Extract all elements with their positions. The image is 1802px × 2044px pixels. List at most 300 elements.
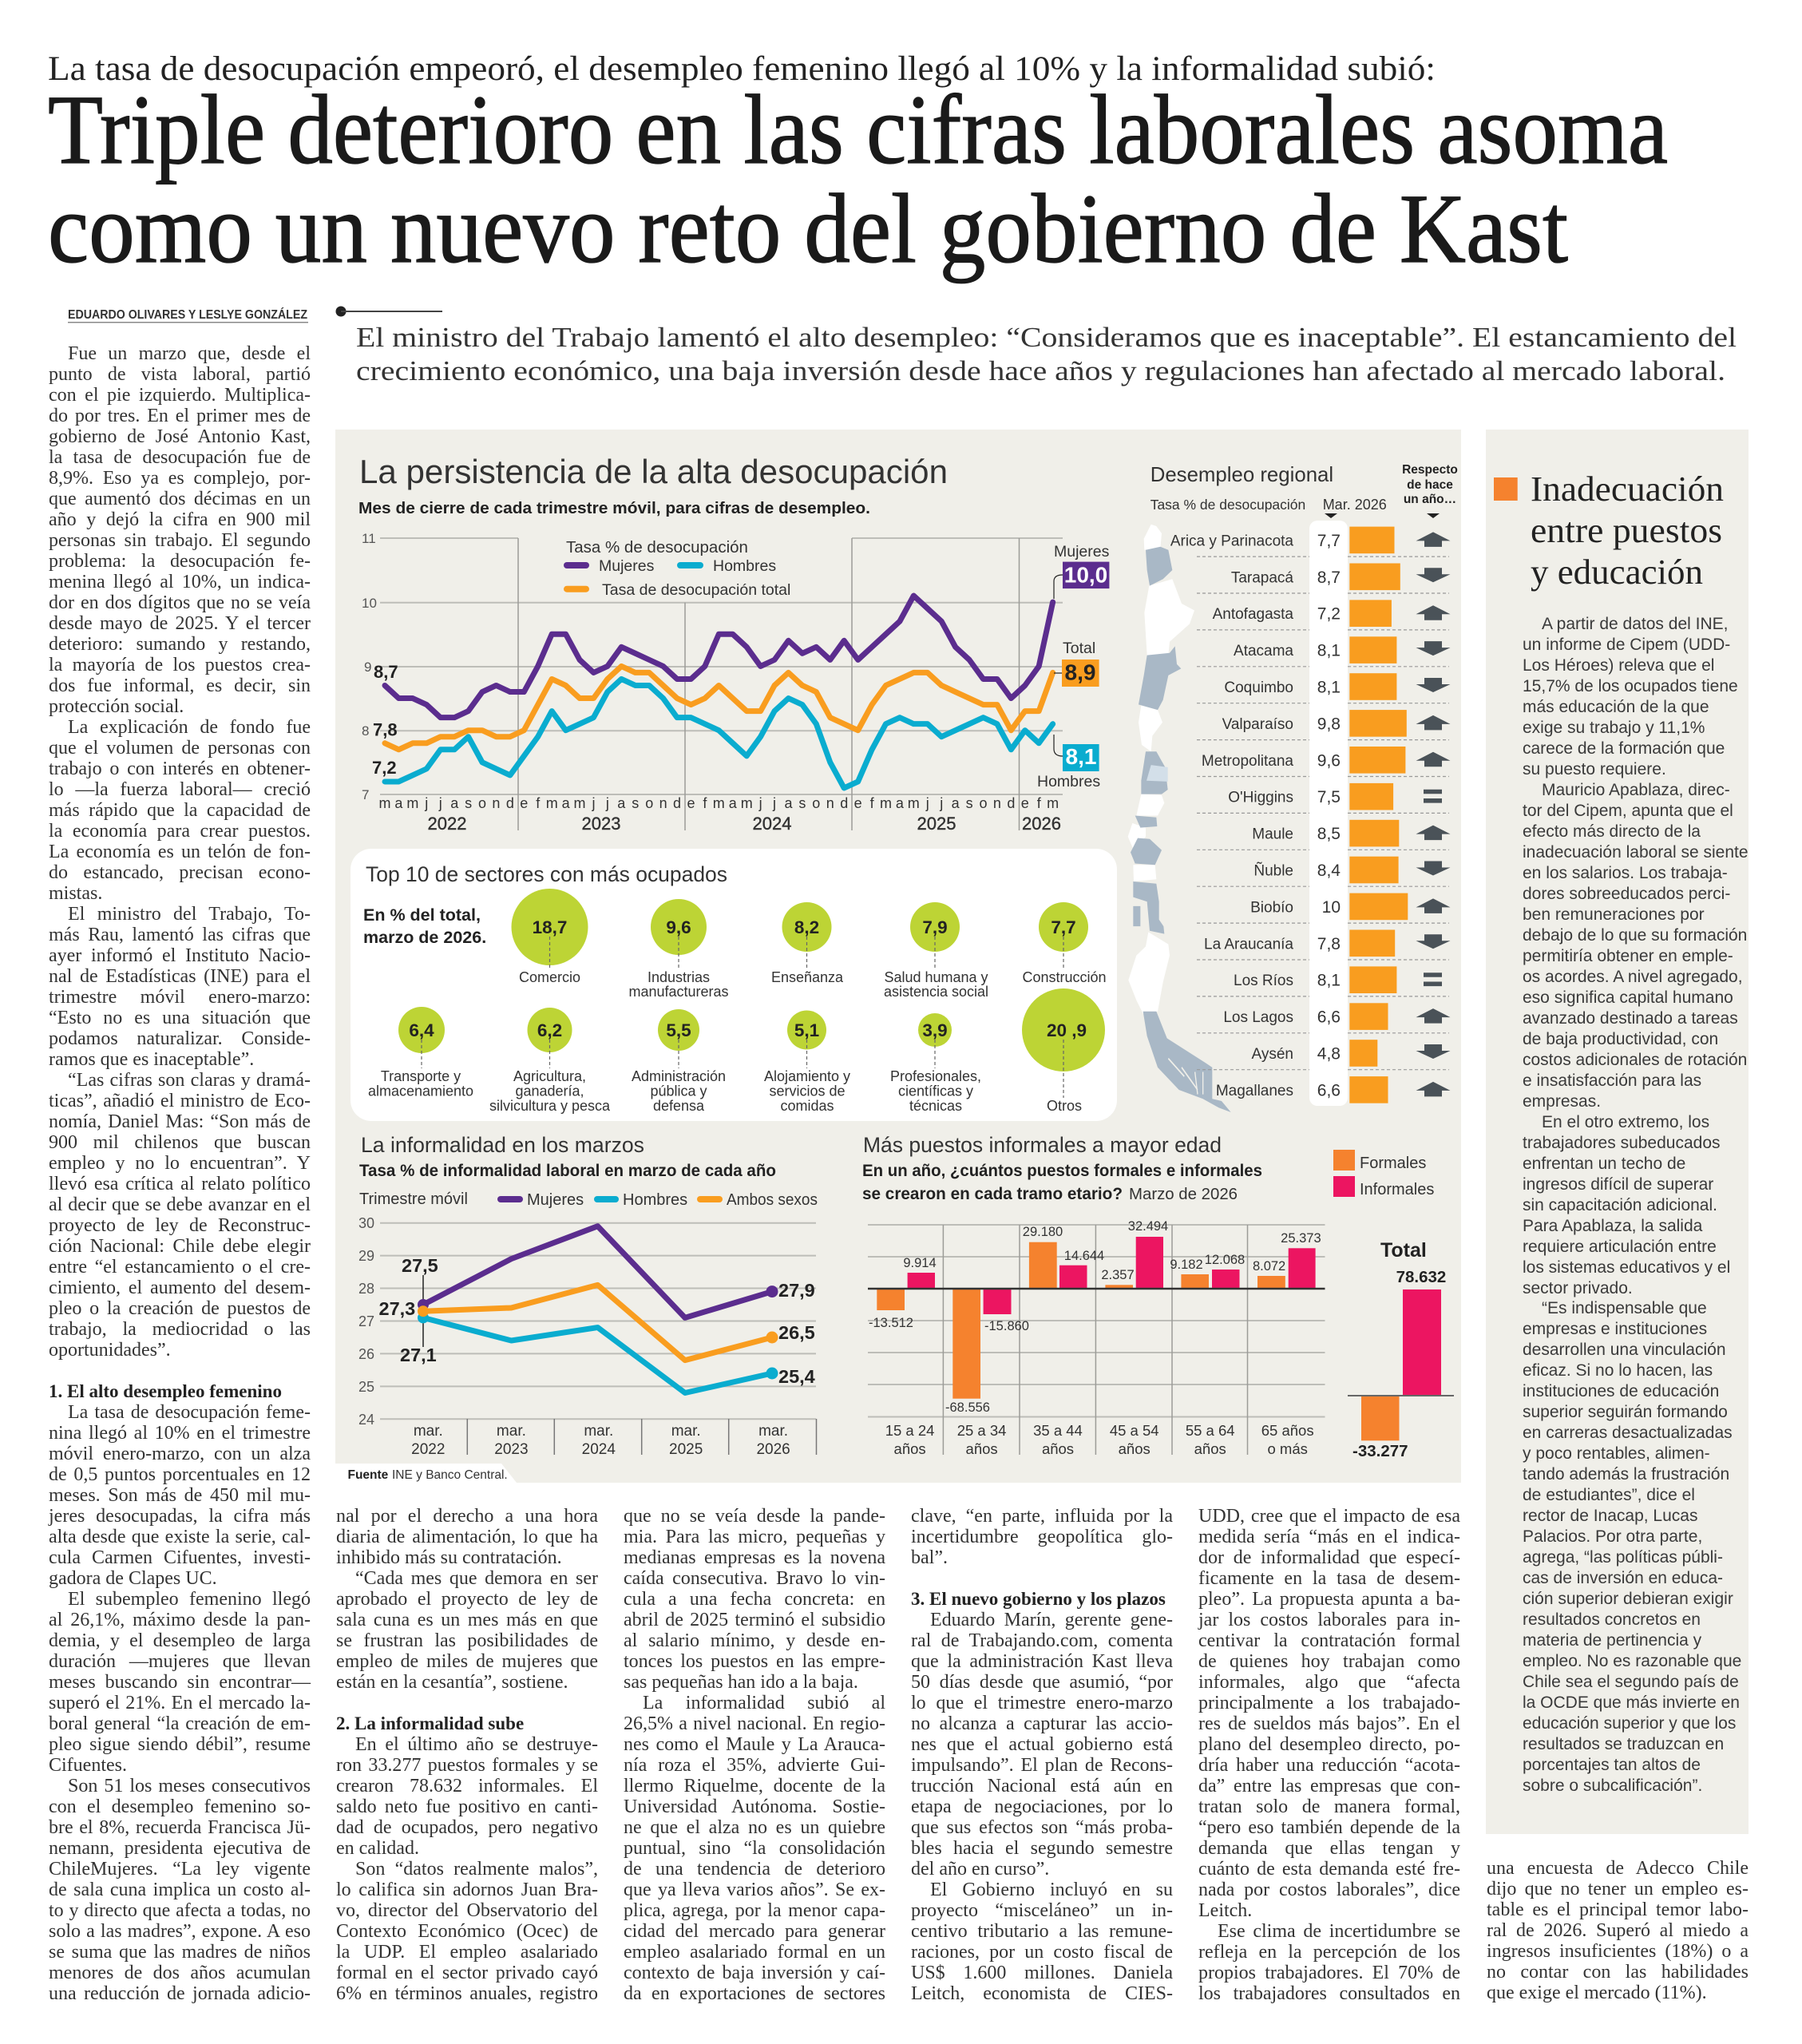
sidebar body text: “Es indispensable que: [1542, 1299, 1707, 1317]
text column 3: al salario mínimo, y desde en-: [624, 1630, 885, 1651]
region names: Valparaíso: [1222, 716, 1293, 733]
deck text: [356, 322, 1737, 386]
informality grid and axes: mar.: [497, 1423, 526, 1440]
regional subtitle and column heads: Mar. 2026: [1323, 497, 1387, 513]
month and year axis labels: [378, 795, 1061, 834]
informality grid and axes: 24: [358, 1412, 374, 1428]
age group labels: años: [1194, 1440, 1226, 1457]
informality legend: Hombres: [623, 1191, 687, 1209]
bubble values: 6,2: [537, 1020, 562, 1040]
sidebar title: [1531, 469, 1724, 592]
text column 1: ticas”, añadió el ministro de Eco-: [49, 1091, 311, 1111]
text column 4: impulsando”. El plan de Recons-: [911, 1755, 1173, 1776]
text column 6: ingresos insuficientes (18%) o a: [1487, 1941, 1749, 1962]
informality legend: Trimestre móvil: [359, 1190, 468, 1208]
text column 3: [624, 1506, 885, 2004]
sidebar body text: Para Apablaza, la salida: [1523, 1217, 1702, 1235]
bubble labels: Alojamiento y: [764, 1068, 850, 1084]
sidebar body text: requiere articulación entre: [1523, 1238, 1717, 1256]
bubble labels: Industrias: [648, 969, 710, 985]
text column 5: nada por costos laborales”, dice: [1198, 1880, 1460, 1900]
sidebar body text: porcentajes tan altos de: [1523, 1756, 1701, 1774]
bars subtitle: Marzo de 2026: [1129, 1186, 1238, 1203]
line: hombres: [385, 679, 1053, 788]
text column 3: mia. Para las micro, pequeñas y: [624, 1527, 885, 1547]
regional subtitle and column heads: un año…: [1404, 493, 1456, 506]
text column 3: ne que el alza no es un quiebre: [624, 1817, 885, 1838]
text column 1: que aumentó dos décimas en un: [49, 489, 311, 509]
text column 5: dría haber una reducción “acota-: [1198, 1755, 1460, 1776]
age group labels: años: [1119, 1440, 1151, 1457]
text column 1: cula Carmen Cifuentes, investi-: [49, 1547, 311, 1568]
y axis and grid: 10: [362, 596, 377, 611]
text column 5: tratan solo de manera formal,: [1198, 1796, 1460, 1817]
text column 1: más rápido que la capacidad de: [49, 800, 311, 821]
bubble labels: asistencia social: [884, 984, 988, 1000]
text column 1: Son 51 los meses consecutivos: [68, 1776, 311, 1796]
informality grid and axes: 26: [358, 1346, 374, 1362]
source note: Fuente: [348, 1468, 389, 1482]
region names: Maule: [1252, 826, 1293, 843]
text column 2: 6% en términos anuales, registro: [336, 1983, 598, 2004]
text column 2: aprobado el proyecto de ley de: [336, 1589, 598, 1610]
panel: sidebar background: [1486, 430, 1749, 1834]
informality value labels: 26,5: [778, 1322, 815, 1343]
text column 2: En el último año se destruye-: [355, 1734, 598, 1755]
text column 1: desde mayo de 2025. Y el tercer: [49, 613, 311, 634]
text column 1: duración —mujeres que llevan: [49, 1651, 311, 1672]
text column 4: 3. El nuevo gobierno y los plazos: [911, 1589, 1166, 1609]
text column 6: una encuesta de Adecco Chile: [1487, 1858, 1749, 1879]
region names: Ñuble: [1253, 862, 1293, 880]
text column 4: bles hacia el segundo semestre: [911, 1838, 1173, 1859]
bars subtitle: [862, 1162, 1262, 1203]
informality value labels: 27,3: [378, 1298, 415, 1319]
text column 3: sas pequeñas han ido a la baja.: [624, 1672, 858, 1693]
text column 6: dijo que no tener un empleo es-: [1487, 1879, 1749, 1899]
end label: hombres: 8,1: [1066, 744, 1096, 769]
text column 1: dos fue informal, es decir, sin: [49, 675, 311, 696]
text column 1: dor en dos dígitos que no se veía: [49, 592, 311, 613]
text column 2: Contexto Económico (Ocec) de: [336, 1921, 598, 1942]
text column 4: [911, 1506, 1173, 2004]
bubble values: 7,7: [1051, 917, 1076, 937]
y axis and grid: 8: [362, 723, 369, 739]
bars title: Más puestos informales a mayor edad: [863, 1133, 1222, 1157]
informality grid and axes: mar.: [671, 1423, 701, 1440]
bubble labels: [368, 969, 1107, 1114]
sidebar body text: sobre o subcalificación”.: [1523, 1777, 1702, 1795]
informality grid and axes: 29: [358, 1248, 374, 1264]
text column 3: puntual, sino “la consolidación: [624, 1838, 885, 1859]
bubble values: 5,1: [794, 1020, 819, 1040]
y axis and grid: [362, 531, 1063, 830]
region values: 7,5: [1317, 788, 1341, 806]
text column 1: la tasa de desocupación fue de: [49, 447, 311, 468]
text column 4: US$ 1.600 millones. Daniela: [911, 1963, 1173, 1983]
sidebar body text: eso significa capital humano: [1523, 988, 1733, 1007]
end label: total: [1054, 640, 1099, 687]
bars: formales: [877, 1242, 1285, 1399]
text column 4: lo que el trimestre enero-marzo: [911, 1693, 1173, 1713]
region values: 6,6: [1317, 1081, 1341, 1099]
text column 1: menina llegó al 10%, un indica-: [49, 572, 311, 592]
end label: hombres: [1037, 735, 1100, 790]
text column 1: El ministro del Trabajo, To-: [68, 904, 311, 925]
informality value labels: 27,5: [402, 1255, 438, 1276]
informality grid and axes: 30: [358, 1215, 374, 1231]
text column 5: dor de informalidad que especí-: [1198, 1547, 1460, 1568]
text column 4: raciones, por un costo fiscal de: [911, 1942, 1173, 1963]
bar value labels: [869, 1219, 1321, 1415]
text column 1: mistas.: [49, 883, 102, 904]
text column 1: empleo y no lo encuentran”. Y: [49, 1153, 311, 1174]
zero line: [868, 1288, 1325, 1289]
text column 1: “Las cifras son claras y dramá-: [68, 1070, 311, 1091]
text column 1: que el volumen de personas con: [49, 738, 311, 759]
region values: 8,1: [1317, 642, 1341, 660]
sidebar body text: permitiría obtener en emple-: [1523, 947, 1733, 965]
text column 1: con el desempleo femenino so-: [49, 1796, 311, 1817]
sidebar body text: Palacios. Por otra parte,: [1523, 1527, 1702, 1546]
sidebar body text: tor del Cipem, apunta que el: [1523, 802, 1733, 820]
bubble values: 8,2: [794, 917, 819, 937]
row separators: [1197, 557, 1449, 1070]
text column 3: La informalidad subió al: [643, 1693, 885, 1713]
bubble labels: silvicultura y pesca: [489, 1098, 611, 1114]
age group labels: años: [966, 1440, 998, 1457]
region values: 8,4: [1317, 862, 1341, 880]
text column 1: Cifuentes.: [49, 1755, 127, 1776]
text column 4: ral de Trabajando.com, comenta: [911, 1630, 1173, 1651]
bars subtitle: se crearon en cada tramo etario?: [862, 1185, 1123, 1203]
bubble labels: Administración: [632, 1068, 726, 1084]
text column 1: bre el 8%, recuerda Francisca Jü-: [49, 1817, 311, 1838]
sidebar body text: Los Héroes) releva que el: [1523, 656, 1714, 675]
text column 2: diaria de alimentación, lo que ha: [336, 1527, 598, 1547]
age group labels: 35 a 44: [1033, 1422, 1083, 1439]
sidebar body text: agrega, “las políticas públi-: [1523, 1548, 1723, 1567]
text column 1: [48, 343, 311, 2004]
region names: Los Lagos: [1223, 1009, 1293, 1026]
region values: 8,1: [1317, 972, 1341, 990]
bars legend: [1333, 1150, 1434, 1198]
text column 5: de quienes hoy trabajan como: [1198, 1651, 1460, 1672]
text column 3: plica, agrega, por la menor capa-: [624, 1900, 885, 1921]
bar value labels: 29.180: [1023, 1225, 1063, 1239]
informality legend: Mujeres: [527, 1191, 584, 1209]
text column 2: lo califica sin adornos Juan Bra-: [336, 1880, 598, 1900]
card subtitle: [363, 905, 486, 947]
sidebar body text: dores sobreeducados perci-: [1523, 885, 1730, 903]
start value labels: 8,7: [374, 662, 398, 682]
informality grid and axes: 2024: [582, 1441, 616, 1458]
text column 1: alta desde que existe la serie, cal-: [49, 1527, 311, 1547]
total bars: -33.277: [1352, 1442, 1408, 1460]
text column 5: Leitch.: [1198, 1900, 1252, 1921]
y axis and grid: 11: [362, 531, 376, 546]
region values: 4,8: [1317, 1044, 1341, 1064]
text column 1: nemann, presidenta ejecutiva de: [49, 1838, 311, 1859]
age group labels: años: [894, 1440, 926, 1457]
region values: 7,2: [1317, 605, 1341, 624]
age group labels: 45 a 54: [1110, 1422, 1159, 1439]
sidebar body text: tando además la frustración: [1523, 1465, 1729, 1483]
text column 4: clave, “en parte, influida por la: [911, 1506, 1173, 1527]
informality grid and axes: 2022: [411, 1441, 445, 1458]
text column 6: table es el principal temor labo-: [1487, 1899, 1749, 1920]
text column 1: trabajo o con interés en obtener-: [49, 759, 311, 779]
text column 1: podamos naturalizar. Conside-: [49, 1028, 311, 1049]
line: mujeres informal: [418, 1226, 778, 1317]
bar value labels: 9.182: [1170, 1258, 1203, 1272]
legend: Tasa de desocupación total: [602, 581, 790, 599]
sidebar body text: instituciones de educación: [1523, 1382, 1719, 1400]
sidebar body text: Mauricio Apablaza, direc-: [1542, 781, 1730, 799]
text column 2: se frustran las posibilidades de: [336, 1630, 598, 1651]
text column 1: entre “el estancamiento o el cre-: [49, 1257, 311, 1278]
informality grid and axes: mar.: [584, 1423, 613, 1440]
map of Chile: [1128, 525, 1231, 1112]
text column 1: jeres desocupadas, la cifra más: [49, 1506, 311, 1527]
region names: Biobío: [1250, 899, 1293, 916]
sidebar body text: ben remuneraciones por: [1523, 905, 1705, 924]
bubble labels: Transporte y: [381, 1068, 461, 1084]
main title: Triple deterioro en las cifras laborales asoma: [48, 75, 1668, 184]
text column 1: gadora de Clapes UC.: [49, 1568, 217, 1589]
bubble labels: Comercio: [519, 969, 580, 985]
sidebar body text: más educación de la que: [1523, 698, 1709, 716]
text column 4: que la administración Kast lleva: [911, 1651, 1173, 1672]
sidebar body text: en carreras desactualizadas: [1523, 1424, 1733, 1442]
region values: 8,1: [1317, 679, 1341, 696]
text column 1: “Esto no es una situación que: [49, 1008, 311, 1028]
sidebar body text: sector privado.: [1523, 1279, 1633, 1297]
deck text: crecimiento económico, una baja inversión desde hace años y regulaciones han afectado al mercado laboral.: [356, 355, 1725, 386]
start value labels: 7,8: [373, 720, 398, 739]
sidebar body text: En el otro extremo, los: [1542, 1113, 1709, 1131]
informality grid and axes: 25: [358, 1379, 374, 1395]
text column 5: jar los costos laborales para in-: [1198, 1610, 1460, 1630]
text column 2: [336, 1506, 598, 2004]
bars: informales: [908, 1237, 1316, 1314]
card subtitle: En % del total,: [363, 905, 481, 925]
text column 2: saldo neto fue positivo en canti-: [336, 1796, 598, 1817]
bubble labels: Agricultura,: [513, 1068, 586, 1084]
informality grid and axes: mar.: [758, 1423, 788, 1440]
regional subtitle and column heads: Tasa % de desocupación: [1151, 497, 1305, 513]
sidebar body text: y poco rentables, alimen-: [1523, 1444, 1710, 1463]
text column 1: nina llegó al 10% en el trimestre: [49, 1423, 311, 1444]
text column 2: dad de ocupados, pero negativo: [336, 1817, 598, 1838]
text column 1: demia, y el desempleo de larga: [49, 1630, 311, 1651]
line: hombres informal: [418, 1312, 778, 1392]
region names: Aysén: [1252, 1046, 1293, 1063]
text column 1: ChileMujeres. “La ley vigente: [49, 1859, 311, 1880]
line: mujeres: [385, 596, 1053, 718]
bar value labels: -68.556: [945, 1400, 990, 1415]
sidebar body text: e insatisfacción para las: [1523, 1072, 1701, 1090]
bubble labels: técnicas: [909, 1098, 962, 1114]
informality value labels: [378, 1255, 815, 1387]
sidebar body text: de estudiantes”, dice el: [1523, 1486, 1695, 1504]
sidebar body text: carece de la formación que: [1523, 739, 1725, 758]
text column 2: Son “datos realmente malos”,: [355, 1859, 598, 1880]
bubble labels: Salud humana y: [884, 969, 988, 985]
sidebar body text: enfrentan un techo de: [1523, 1155, 1685, 1173]
region names: Magallanes: [1216, 1083, 1293, 1099]
bubble values: 6,4: [409, 1020, 434, 1040]
text column 1: móvil enero-marzo, con un alza: [49, 1444, 311, 1464]
bubble labels: almacenamiento: [368, 1083, 473, 1099]
sidebar body text: educación superior y que los: [1523, 1714, 1736, 1733]
total bars: 78.632: [1396, 1268, 1446, 1286]
text column 5: propios trabajadores. El 70% de: [1198, 1963, 1460, 1983]
text column 3: tonces los puestos en las empre-: [624, 1651, 885, 1672]
region values: 6,6: [1317, 1008, 1341, 1027]
text column 5: pleo”. La propuesta apunta a ba-: [1198, 1589, 1460, 1610]
regional title: Desempleo regional: [1151, 464, 1333, 486]
text column 2: inhibido más su contratación.: [336, 1547, 562, 1568]
text column 1: punto de vista laboral, partió: [49, 364, 311, 385]
age group labels: años: [1042, 1440, 1074, 1457]
text column 1: menores de dos años acumulan: [49, 1963, 311, 1983]
legend: [566, 538, 790, 599]
text column 1: La explicación de fondo fue: [68, 717, 311, 738]
text column 1: año y dejó la cifra en 900 mil: [49, 509, 311, 530]
text column 3: 26,5% a nivel nacional. En regio-: [624, 1713, 885, 1734]
bubble labels: Enseñanza: [771, 969, 844, 985]
text column 2: 2. La informalidad sube: [336, 1713, 524, 1733]
text column 4: incertidumbre geopolítica glo-: [911, 1527, 1173, 1547]
text column 1: lo —la fuerza laboral— creció: [49, 779, 311, 800]
text column 1: trimestre móvil enero-marzo:: [49, 987, 311, 1008]
sidebar body text: cas de inversión en educa-: [1523, 1569, 1723, 1587]
text column 1: trabajo, la mediocridad o las: [49, 1319, 311, 1340]
sidebar body text: los sistemas educativos y el: [1523, 1258, 1730, 1277]
text column 5: cuánto de esta demanda esté fre-: [1198, 1859, 1460, 1880]
region names: Atacama: [1234, 643, 1293, 660]
text column 3: contexto de baja inversión y caí-: [624, 1963, 885, 1983]
text column 4: bal”.: [911, 1547, 948, 1568]
chart subtitle: Mes de cierre de cada trimestre móvil, para cifras de desempleo.: [358, 499, 870, 517]
main title: como un nuevo reto del gobierno de Kast: [48, 174, 1568, 283]
sidebar body text: materia de pertinencia y: [1523, 1631, 1701, 1650]
legend: Hombres: [713, 557, 776, 575]
bubble values: 20 ,9: [1047, 1020, 1087, 1040]
panel: informality line chart: [358, 1133, 818, 1458]
text column 1: cimiento, el aumento del desem-: [49, 1278, 311, 1298]
text column 5: medida sería “más en el indica-: [1198, 1527, 1460, 1547]
sidebar body text: ción superior debieran exigir: [1523, 1590, 1733, 1608]
region values: [1317, 532, 1341, 1099]
text column 4: no alcanza a capturar las accio-: [911, 1713, 1173, 1734]
sidebar body text: de baja productividad, con: [1523, 1030, 1718, 1048]
text column 1: de sala cuna implica un costo al-: [49, 1880, 311, 1900]
bubble labels: Profesionales,: [890, 1068, 981, 1084]
text column 3: que ya lleva varios años”. Se ex-: [624, 1880, 885, 1900]
text column 4: del año en curso”.: [911, 1859, 1049, 1880]
sidebar body text: un informe de Cipem (UDD-: [1523, 636, 1730, 654]
region names: Tarapacá: [1231, 569, 1293, 586]
text column 4: nes que el actual gobierno está: [911, 1734, 1173, 1755]
bubble labels: manufactureras: [628, 984, 729, 1000]
text column 6: ral de 2026. Superó al miedo a: [1487, 1920, 1749, 1941]
region values: 9,6: [1317, 751, 1341, 770]
text column 1: do estancado, precisan econo-: [49, 862, 311, 883]
sidebar body text: Chile sea el segundo país de: [1523, 1673, 1739, 1691]
text column 4: 50 días desde que asumió, “por: [911, 1672, 1173, 1693]
text column 1: de 0,5 puntos porcentuales en 12: [49, 1464, 311, 1485]
region values: 8,5: [1317, 825, 1341, 843]
sidebar body text: superior seguirán formando: [1523, 1403, 1728, 1421]
text column 6: no contar con las habilidades: [1487, 1962, 1749, 1983]
text column 1: una reducción de jornada adicio-: [49, 1983, 311, 2004]
text column 1: protección social.: [49, 696, 184, 717]
callout stem: [422, 1275, 424, 1347]
text column 2: vo, director del Observatorio del: [336, 1900, 598, 1921]
bubble labels: Construcción: [1022, 969, 1107, 985]
start value labels: [372, 662, 398, 778]
end label: mujeres: 10,0: [1064, 562, 1107, 588]
sidebar body text: exige su trabajo y 11,1%: [1523, 719, 1705, 737]
bubble values: 18,7: [533, 917, 567, 937]
month and year axis labels: 2023: [582, 814, 620, 834]
regional subtitle and column heads: [1151, 463, 1458, 518]
text column 3: llermo Riquelme, docente de la: [624, 1776, 885, 1796]
regional subtitle and column heads: de hace: [1407, 478, 1453, 492]
card title: Top 10 de sectores con más ocupados: [366, 862, 727, 886]
text column 5: Ese clima de incertidumbre se: [1218, 1921, 1460, 1942]
start value labels: 7,2: [372, 758, 397, 778]
bubble labels: servicios de: [769, 1083, 846, 1099]
text column 2: empleo de miles de mujeres que: [336, 1651, 598, 1672]
bubbles: [398, 889, 1105, 1072]
region names: O'Higgins: [1228, 790, 1293, 806]
sidebar body text: ingresos difícil de superar: [1523, 1175, 1713, 1194]
text column 1: gobierno de José Antonio Kast,: [49, 426, 311, 447]
informality value labels: 27,1: [400, 1345, 437, 1365]
text column 5: “pero eso también depende de la: [1198, 1817, 1460, 1838]
sidebar body text: costos adicionales de rotación: [1523, 1051, 1747, 1069]
sidebar body text: su puesto requiere.: [1523, 760, 1666, 778]
region values: 8,7: [1317, 568, 1341, 587]
sidebar body text: [1523, 615, 1749, 1795]
informality legend: [359, 1190, 818, 1209]
text column 1: la economía para crear puestos.: [49, 821, 311, 842]
card subtitle: marzo de 2026.: [363, 928, 486, 947]
sidebar body text: resultados se traduzcan en: [1523, 1735, 1724, 1753]
informality value labels: 25,4: [778, 1366, 815, 1387]
region names: Los Ríos: [1234, 972, 1293, 989]
text column 1: pleo sigue siendo débil”, resume: [49, 1734, 311, 1755]
bubble values: 5,5: [666, 1020, 691, 1040]
text column 1: El subempleo femenino llegó: [68, 1589, 311, 1610]
sidebar body text: rector de Inacap, Lucas: [1523, 1507, 1697, 1525]
text column 1: problema: la desocupación fe-: [49, 551, 311, 572]
text column 3: nía roza el 35%, advierte Gui-: [624, 1755, 885, 1776]
region bars: [1349, 527, 1408, 1103]
text column 1: ramos que es inaceptable”.: [49, 1049, 254, 1070]
text column 2: crearon 78.632 informales. El: [336, 1776, 598, 1796]
deck marker: dot and rule: [335, 307, 442, 316]
sidebar body text: os acordes. A nivel agregado,: [1523, 968, 1743, 986]
text column 6: [1487, 1858, 1749, 2003]
sidebar body text: desarrollen una vinculación: [1523, 1341, 1726, 1359]
text column 1: solo a las madres”, expone. A eso: [49, 1921, 311, 1942]
regional subtitle and column heads: Respecto: [1402, 463, 1458, 477]
age group labels: 55 a 64: [1186, 1422, 1235, 1439]
